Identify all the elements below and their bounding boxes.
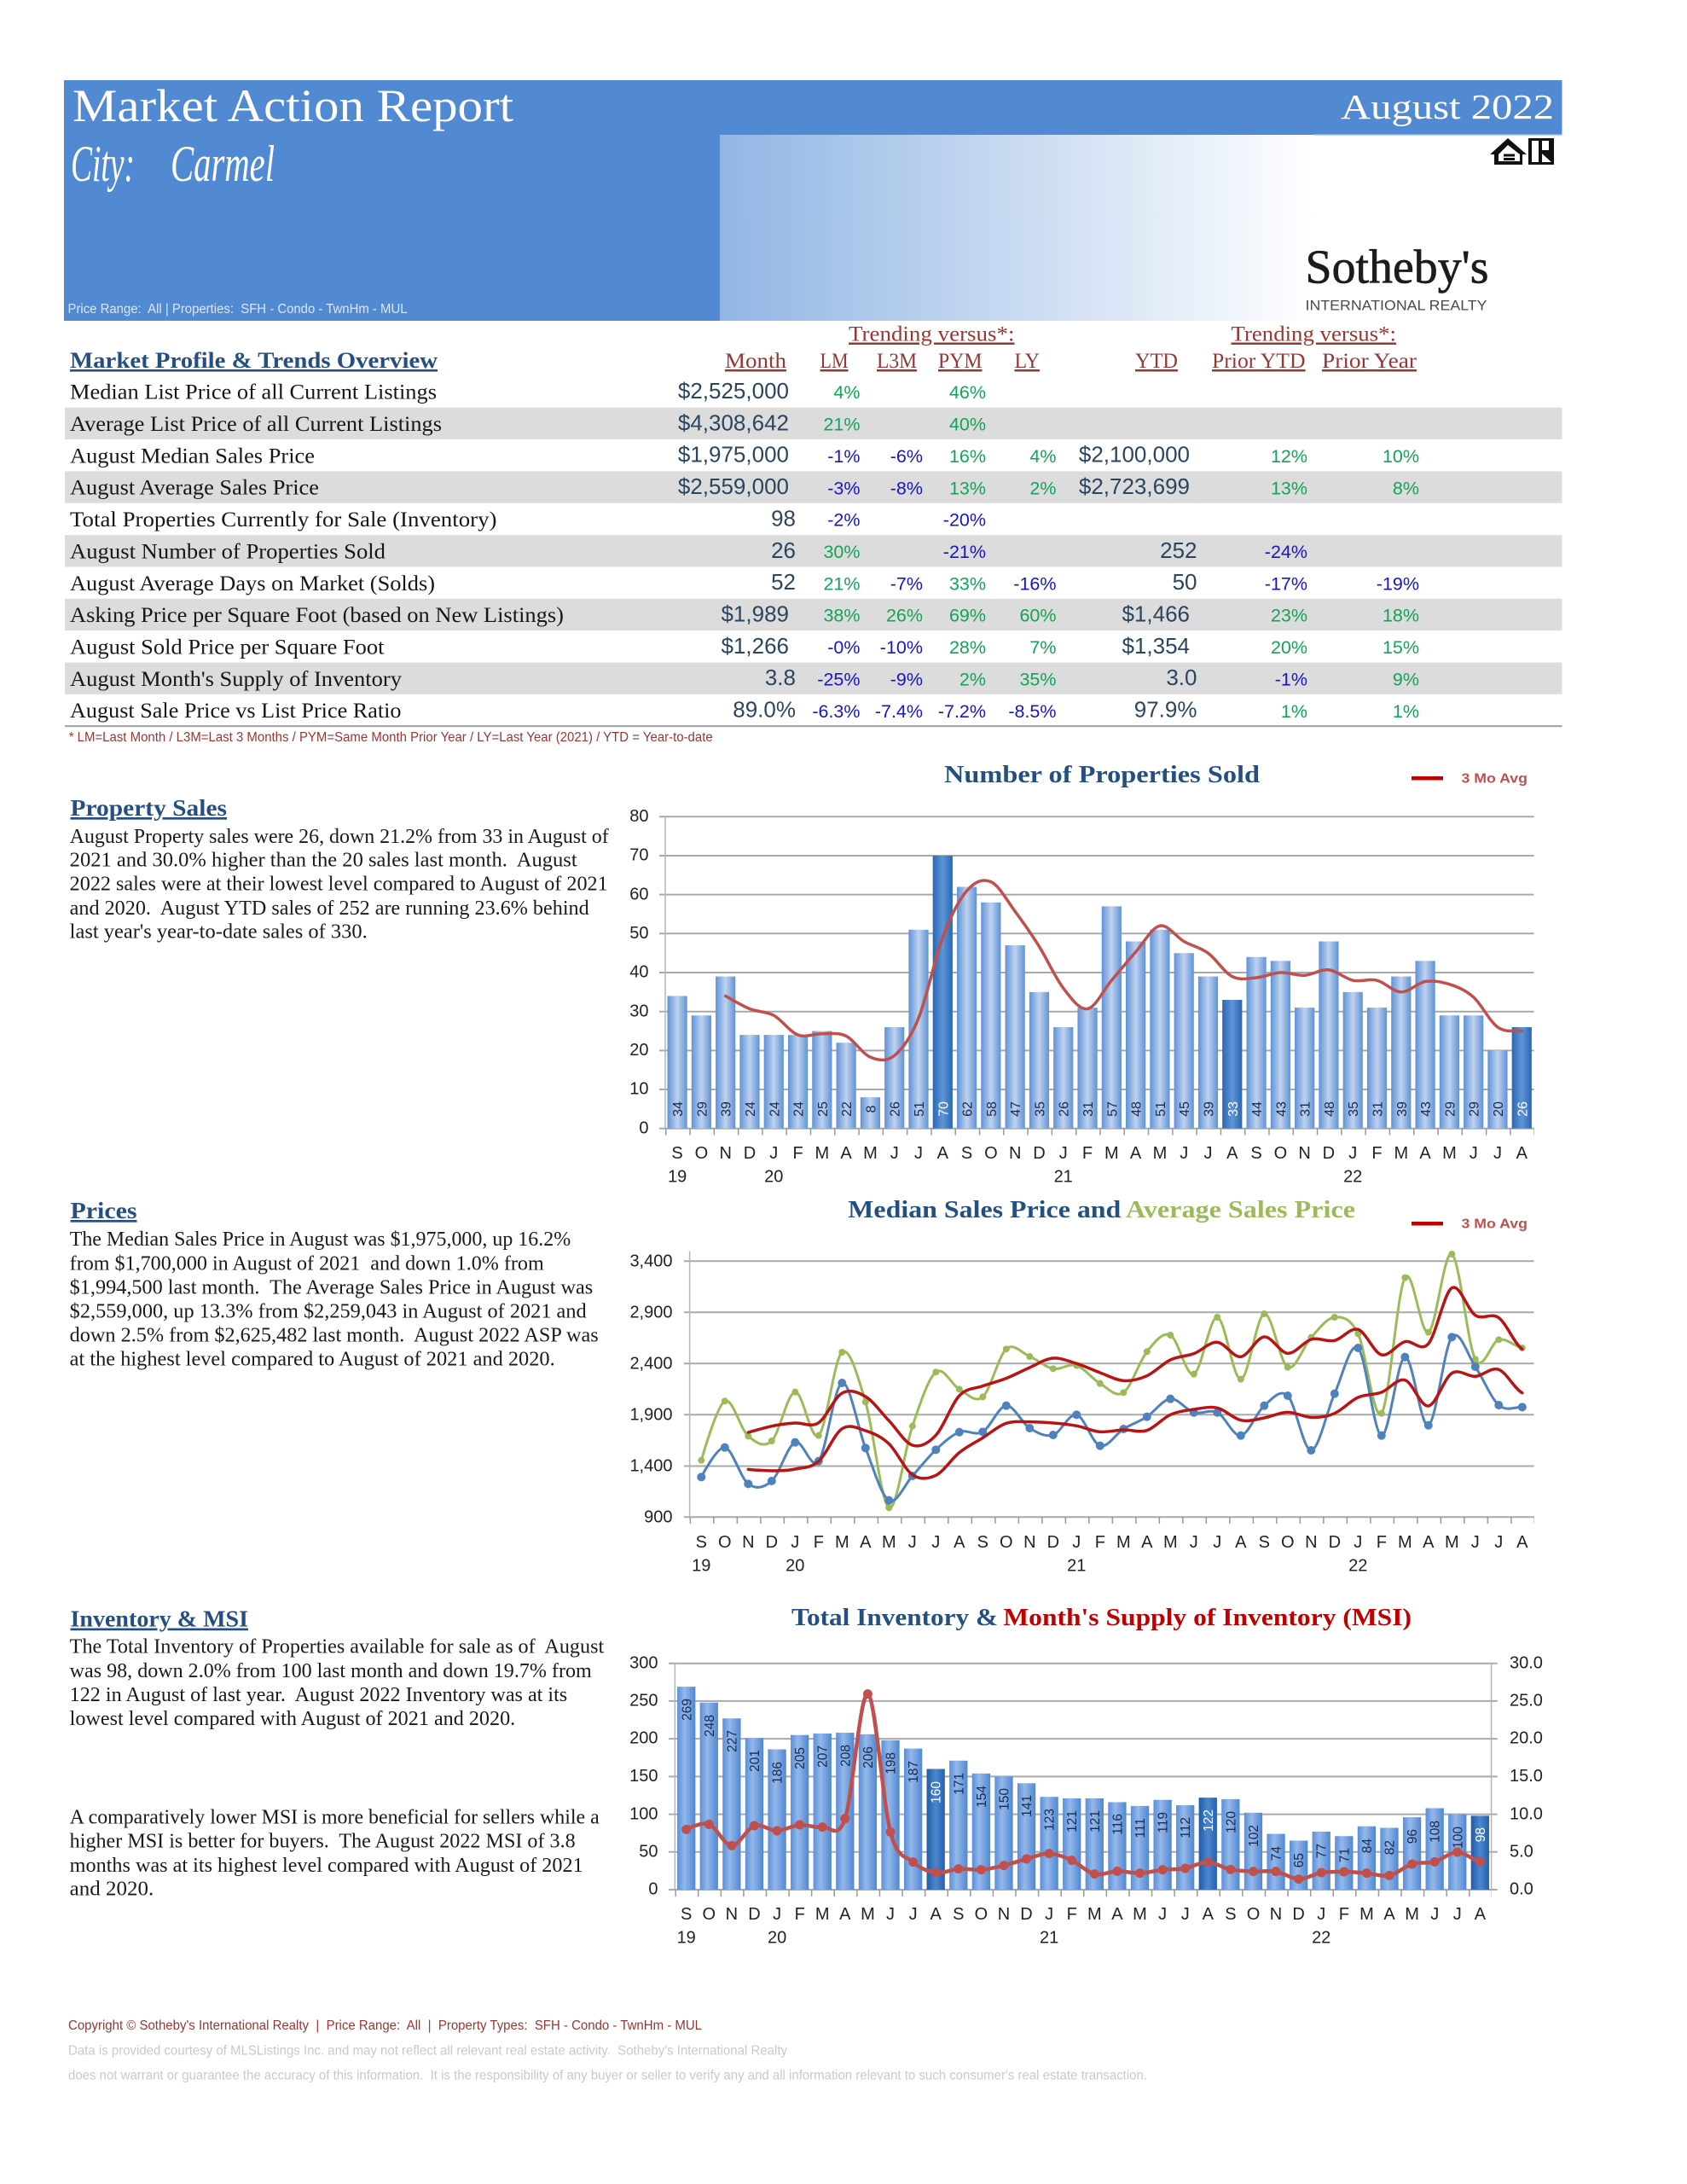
row: average sales price: $2,723,699 bbox=[1079, 473, 1190, 499]
left y axis labels: 0 bbox=[648, 1880, 658, 1899]
row: average list price: 21% bbox=[823, 415, 860, 435]
row: days on market: 50 bbox=[1173, 569, 1197, 595]
y axis labels: 60 bbox=[629, 886, 648, 904]
bar value labels: 22 bbox=[840, 1101, 855, 1117]
x axis years bbox=[668, 1168, 1362, 1187]
row: inventory: 98 bbox=[771, 505, 796, 531]
bar value labels: 43 bbox=[1419, 1101, 1434, 1117]
y axis labels: 80 bbox=[629, 807, 648, 826]
column headers: PYM bbox=[938, 350, 983, 373]
row: sale to list ratio: -8.5% bbox=[1008, 701, 1056, 722]
bar value labels: 186 bbox=[771, 1762, 785, 1784]
chart title: Number of Properties Sold bbox=[944, 762, 1260, 788]
row: sold price per square foot: -0% bbox=[827, 637, 860, 658]
y axis labels bbox=[629, 1252, 672, 1527]
right y axis labels: 5.0 bbox=[1510, 1843, 1533, 1862]
x axis years: 22 bbox=[1312, 1928, 1330, 1947]
footer disclaimer: does not warrant or guarantee the accuracy of this information. It is the responsibility of any buyer or seller to verify any and all information relevant to such consumer's real estate transaction. bbox=[68, 2068, 1147, 2082]
row: sold price per square foot: 28% bbox=[949, 637, 986, 658]
y axis labels: 1,400 bbox=[629, 1457, 672, 1476]
bar value labels: 70 bbox=[936, 1101, 951, 1117]
city name: Carmel bbox=[171, 136, 275, 192]
bar value labels: 65 bbox=[1292, 1853, 1307, 1867]
row: sale to list ratio bbox=[70, 696, 1419, 723]
text block: inventory and MSI: lowest level compared with August of 2021 and 2020. bbox=[70, 1708, 515, 1730]
text block: prices bbox=[70, 1198, 599, 1370]
icon: equal housing and realtor bbox=[1490, 138, 1554, 165]
chart: median and average sales price bbox=[629, 1197, 1534, 1576]
row: median list price: $2,525,000 bbox=[678, 378, 789, 404]
bar value labels: 171 bbox=[952, 1773, 966, 1795]
bar value labels: 34 bbox=[671, 1101, 686, 1117]
text block: prices: at the highest level compared to August of 2021 and 2020. bbox=[70, 1348, 555, 1370]
row: median list price: Median List Price of all Current Listings bbox=[70, 381, 437, 404]
bar value labels: 24 bbox=[744, 1101, 758, 1117]
row: months supply: 35% bbox=[1019, 669, 1056, 689]
row: months supply: August Month's Supply of Inventory bbox=[70, 668, 403, 691]
text block: prices: from $1,700,000 in August of 2021 and down 1.0% from bbox=[70, 1252, 544, 1275]
column headers: LM bbox=[820, 350, 848, 373]
bar value labels: 227 bbox=[725, 1730, 740, 1752]
line: 3 month average bbox=[726, 880, 1522, 1060]
table heading: Market Profile & Trends Overview bbox=[70, 348, 438, 373]
bar value labels: 116 bbox=[1110, 1814, 1125, 1835]
row: average list price: 40% bbox=[949, 415, 986, 435]
bar value labels: 77 bbox=[1315, 1844, 1330, 1858]
row: sold price per square foot: $1,354 bbox=[1122, 633, 1190, 659]
bar value labels: 71 bbox=[1337, 1848, 1352, 1862]
row: median sales price: -6% bbox=[890, 446, 923, 467]
bar value labels: 102 bbox=[1247, 1825, 1261, 1847]
column headers: LY bbox=[1015, 350, 1040, 373]
row: median sales price: 16% bbox=[949, 446, 986, 467]
left y axis labels: 100 bbox=[629, 1805, 658, 1824]
row: asking price per square foot: 26% bbox=[886, 606, 923, 626]
x axis years: 20 bbox=[764, 1168, 783, 1187]
line: 3 month average of average price bbox=[748, 1287, 1522, 1446]
row: sold price per square foot: 15% bbox=[1383, 637, 1419, 658]
row: sold price per square foot: 20% bbox=[1271, 637, 1307, 658]
bar value labels: 29 bbox=[1468, 1101, 1482, 1117]
row: sold price per square foot: 7% bbox=[1029, 637, 1056, 658]
footer disclaimer bbox=[68, 2018, 1147, 2082]
bar value labels: 48 bbox=[1130, 1101, 1145, 1117]
chart title: Average Sales Price bbox=[1126, 1197, 1355, 1223]
row: sale to list ratio: -6.3% bbox=[812, 701, 860, 722]
bar value labels: 31 bbox=[1371, 1101, 1385, 1117]
row: days on market: 21% bbox=[823, 573, 860, 594]
bar value labels: 45 bbox=[1178, 1101, 1192, 1117]
right y axis labels: 10.0 bbox=[1510, 1805, 1543, 1824]
text block: prices: $1,994,500 last month. The Average Sales Price in August was bbox=[70, 1276, 593, 1298]
column headers: Trending versus*: bbox=[849, 322, 1015, 346]
bar value labels: 82 bbox=[1383, 1840, 1397, 1855]
bar value labels: 208 bbox=[838, 1745, 853, 1767]
right y axis labels: 25.0 bbox=[1510, 1691, 1543, 1710]
row: properties sold: 26 bbox=[771, 537, 796, 563]
row: asking price per square foot: 23% bbox=[1271, 606, 1307, 626]
text block: inventory and MSI: and 2020. bbox=[70, 1879, 154, 1901]
row: median sales price: 10% bbox=[1383, 446, 1419, 467]
bar value labels: 31 bbox=[1299, 1101, 1313, 1117]
right y axis labels bbox=[1510, 1653, 1543, 1899]
bar value labels: 35 bbox=[1034, 1101, 1047, 1117]
bar value labels: 8 bbox=[864, 1105, 878, 1112]
text block: property sales: August Property sales were 26, down 21.2% from 33 in August of bbox=[70, 826, 609, 848]
row: sale to list ratio: -7.4% bbox=[875, 701, 923, 722]
row: sale to list ratio: August Sale Price vs List Price Ratio bbox=[70, 700, 401, 723]
row: asking price per square foot: 18% bbox=[1383, 606, 1419, 626]
bar value labels: 120 bbox=[1224, 1811, 1238, 1833]
column headers: Prior YTD bbox=[1212, 350, 1305, 373]
x axis years: 19 bbox=[677, 1928, 696, 1947]
bar value labels: 207 bbox=[816, 1745, 831, 1768]
bar value labels: 112 bbox=[1179, 1817, 1193, 1838]
row: asking price per square foot bbox=[70, 601, 1419, 627]
row: days on market: -19% bbox=[1377, 573, 1419, 594]
row: days on market: August Average Days on Market (Solds) bbox=[70, 572, 435, 595]
bar value labels: 24 bbox=[792, 1101, 807, 1117]
text block: property sales bbox=[70, 795, 609, 944]
row: average list price bbox=[70, 410, 986, 436]
x axis years: 21 bbox=[1040, 1928, 1058, 1947]
bar value labels: 43 bbox=[1274, 1101, 1289, 1117]
bar value labels: 39 bbox=[1203, 1101, 1216, 1117]
header banner bbox=[64, 80, 1562, 321]
row: days on market: -7% bbox=[890, 573, 923, 594]
bars: properties sold per month bbox=[668, 856, 1532, 1129]
column headers: YTD bbox=[1135, 350, 1178, 373]
row: asking price per square foot: $1,989 bbox=[721, 601, 789, 626]
left y axis labels: 50 bbox=[639, 1843, 658, 1862]
bar value labels: 141 bbox=[1020, 1795, 1035, 1817]
footnote: * LM=Last Month / L3M=Last 3 Months / PYM=Same Month Prior Year / LY=Last Year (2021) / YTD = Year-to-date bbox=[69, 730, 713, 745]
y axis labels: 70 bbox=[629, 846, 648, 865]
x axis years: 22 bbox=[1343, 1168, 1362, 1187]
y axis labels: 900 bbox=[644, 1508, 672, 1527]
row: days on market: 33% bbox=[949, 573, 986, 594]
text block: inventory and MSI: 122 in August of last year. August 2022 Inventory was at its bbox=[70, 1684, 567, 1706]
row: asking price per square foot: Asking Price per Square Foot (based on New Listings) bbox=[70, 604, 564, 627]
row: asking price per square foot: 38% bbox=[823, 606, 860, 626]
row: median list price: 4% bbox=[833, 382, 860, 403]
row: months supply: 9% bbox=[1393, 669, 1419, 689]
chart title: Total Inventory & bbox=[791, 1605, 998, 1631]
row: months supply: 3.0 bbox=[1166, 665, 1197, 690]
logo: Sotheby's International Realty: Sotheby's bbox=[1305, 241, 1489, 294]
city name bbox=[71, 136, 275, 192]
y axis labels: 40 bbox=[629, 962, 648, 981]
row: median sales price bbox=[70, 442, 1419, 468]
y axis labels: 2,400 bbox=[629, 1355, 672, 1374]
x axis years: 22 bbox=[1348, 1557, 1367, 1576]
row: days on market: -16% bbox=[1013, 573, 1056, 594]
row: properties sold: August Number of Properties Sold bbox=[70, 540, 386, 563]
footer disclaimer: Data is provided courtesy of MLSListings Inc. and may not reflect all relevant real estate activity. Sotheby's International Realty bbox=[68, 2044, 787, 2058]
row: properties sold: 252 bbox=[1160, 537, 1197, 563]
bar value labels: 198 bbox=[884, 1752, 899, 1774]
row: average list price: $4,308,642 bbox=[678, 410, 789, 435]
row: average sales price: 13% bbox=[1271, 478, 1307, 498]
bar value labels bbox=[671, 1101, 1530, 1117]
bar value labels: 84 bbox=[1360, 1838, 1375, 1853]
bar value labels: 35 bbox=[1347, 1101, 1361, 1117]
bar value labels: 160 bbox=[930, 1781, 944, 1804]
row: months supply: -1% bbox=[1275, 669, 1307, 689]
row: sale to list ratio: 1% bbox=[1281, 701, 1307, 722]
bar value labels: 57 bbox=[1105, 1101, 1120, 1117]
row: asking price per square foot: 60% bbox=[1019, 606, 1056, 626]
text block: prices: down 2.5% from $2,625,482 last month. August 2022 ASP was bbox=[70, 1324, 599, 1346]
bar value labels: 33 bbox=[1226, 1101, 1241, 1117]
footer disclaimer: Copyright © Sotheby's International Realty | Price Range: All | Property Types: SFH - Condo - TwnHm - MUL bbox=[68, 2018, 702, 2033]
bar value labels: 122 bbox=[1202, 1809, 1216, 1832]
city name: City: bbox=[71, 136, 135, 192]
row: properties sold: 30% bbox=[823, 542, 860, 562]
bar value labels: 248 bbox=[703, 1715, 717, 1737]
bar value labels: 121 bbox=[1088, 1810, 1103, 1833]
row: average sales price: 13% bbox=[949, 478, 986, 498]
bar value labels: 111 bbox=[1133, 1818, 1148, 1838]
text block: property sales: 2022 sales were at their lowest level compared to August of 2021 bbox=[70, 874, 608, 896]
x axis years: 21 bbox=[1067, 1557, 1086, 1576]
left y axis labels: 300 bbox=[629, 1653, 658, 1672]
legend: 3 month average bbox=[1412, 1217, 1528, 1231]
text block: inventory and MSI: higher MSI is better for buyers. The August 2022 MSI of 3.8 bbox=[70, 1831, 576, 1853]
bar value labels: 154 bbox=[975, 1786, 989, 1808]
row: properties sold: -24% bbox=[1265, 542, 1307, 562]
row: sold price per square foot: -10% bbox=[880, 637, 923, 658]
text block: property sales: 2021 and 30.0% higher than the 20 sales last month. August bbox=[70, 850, 577, 872]
title: Market Action Report bbox=[72, 80, 513, 131]
heading: inventory and MSI: Inventory & MSI bbox=[70, 1606, 248, 1631]
y axis labels: 3,400 bbox=[629, 1252, 672, 1271]
bar value labels: 25 bbox=[816, 1101, 831, 1117]
text block: property sales: and 2020. August YTD sales of 252 are running 23.6% behind bbox=[70, 897, 589, 920]
row: inventory: Total Properties Currently for Sale (Inventory) bbox=[70, 508, 496, 531]
row: sale to list ratio: -7.2% bbox=[938, 701, 986, 722]
legend: 3 month average: 3 Mo Avg bbox=[1462, 1217, 1528, 1231]
row: median sales price: August Median Sales Price bbox=[70, 444, 315, 468]
line: months supply of inventory bbox=[687, 1694, 1480, 1879]
line: average sales price bbox=[701, 1254, 1522, 1508]
bar value labels bbox=[681, 1699, 1488, 1867]
left y axis labels: 250 bbox=[629, 1691, 658, 1710]
column headers: L3M bbox=[877, 350, 917, 373]
row: inventory: -20% bbox=[943, 510, 986, 531]
bar value labels: 48 bbox=[1323, 1101, 1337, 1117]
bar value labels: 123 bbox=[1043, 1809, 1058, 1831]
chart title: Median Sales Price and bbox=[848, 1197, 1122, 1223]
row: properties sold bbox=[70, 537, 1307, 563]
row: sold price per square foot: $1,266 bbox=[721, 633, 789, 659]
bar value labels: 119 bbox=[1157, 1812, 1171, 1833]
row: median sales price: -1% bbox=[827, 446, 860, 467]
bar value labels: 206 bbox=[861, 1746, 876, 1769]
row: median list price bbox=[70, 378, 986, 404]
x axis years: 21 bbox=[1054, 1168, 1073, 1187]
row: months supply bbox=[70, 665, 1419, 691]
chart title: Month's Supply of Inventory (MSI) bbox=[1003, 1605, 1412, 1631]
row: average sales price: 2% bbox=[1029, 478, 1056, 498]
bar value labels: 51 bbox=[1154, 1101, 1168, 1117]
chart: number of properties sold bbox=[629, 762, 1534, 1187]
x axis years: 19 bbox=[668, 1168, 687, 1187]
bar value labels: 121 bbox=[1065, 1810, 1080, 1833]
right y axis labels: 20.0 bbox=[1510, 1728, 1543, 1747]
row: sale to list ratio: 97.9% bbox=[1134, 696, 1197, 722]
bar value labels: 29 bbox=[695, 1101, 710, 1117]
row: asking price per square foot: $1,466 bbox=[1122, 601, 1190, 626]
row: sold price per square foot bbox=[70, 633, 1419, 659]
row: median sales price: $1,975,000 bbox=[678, 442, 789, 468]
x axis years: 20 bbox=[768, 1928, 786, 1947]
text block: inventory and MSI: A comparatively lower MSI is more beneficial for sellers while a bbox=[70, 1807, 600, 1829]
bar value labels: 20 bbox=[1492, 1101, 1506, 1117]
bar value labels: 96 bbox=[1406, 1829, 1420, 1844]
chart title bbox=[848, 1197, 1355, 1223]
y axis labels: 0 bbox=[639, 1119, 648, 1138]
column headers: Prior Year bbox=[1322, 350, 1417, 373]
text block: prices: The Median Sales Price in August was $1,975,000, up 16.2% bbox=[70, 1228, 571, 1251]
row: asking price per square foot: 69% bbox=[949, 606, 986, 626]
bar value labels: 201 bbox=[748, 1750, 762, 1772]
lines: prices bbox=[701, 1254, 1522, 1508]
text block: inventory and MSI: months was at its highest level compared with August of 2021 bbox=[70, 1855, 583, 1877]
price range note: Price Range: All | Properties: SFH - Condo - TwnHm - MUL bbox=[68, 302, 408, 317]
row: average list price: Average List Price of all Current Listings bbox=[70, 413, 442, 436]
bar value labels: 205 bbox=[793, 1747, 808, 1769]
heading: property sales: Property Sales bbox=[70, 795, 227, 821]
panel: market profile table bbox=[65, 322, 1562, 727]
y axis labels: 20 bbox=[629, 1041, 648, 1060]
bar value labels: 62 bbox=[961, 1101, 976, 1117]
bar value labels: 26 bbox=[889, 1101, 903, 1117]
y axis labels: 30 bbox=[629, 1002, 648, 1020]
row: days on market bbox=[70, 569, 1419, 595]
row: months supply: -25% bbox=[817, 669, 860, 689]
bar value labels: 29 bbox=[1443, 1101, 1458, 1117]
row: sale to list ratio: 89.0% bbox=[733, 696, 796, 722]
row: months supply: -9% bbox=[890, 669, 923, 689]
x axis months: SONDJFMAMJJASONDJFMAMJJASONDJFMAMJJA bbox=[671, 1144, 1528, 1163]
y axis labels: 50 bbox=[629, 924, 648, 943]
bar value labels: 39 bbox=[720, 1101, 734, 1117]
row: days on market: 52 bbox=[771, 569, 796, 595]
row: average sales price: August Average Sales Price bbox=[70, 477, 319, 500]
x axis years: 20 bbox=[786, 1557, 804, 1576]
x axis months: SONDJFMAMJJASONDJFMAMJJASONDJFMAMJJA bbox=[681, 1905, 1487, 1924]
text block: inventory and MSI: The Total Inventory of Properties available for sale as of August bbox=[70, 1636, 605, 1658]
logo: Sotheby's International Realty: INTERNATIONAL REALTY bbox=[1305, 298, 1487, 313]
text block: inventory and MSI: was 98, down 2.0% from 100 last month and down 19.7% from bbox=[70, 1660, 592, 1682]
text block: inventory and MSI bbox=[70, 1606, 605, 1901]
bar value labels: 26 bbox=[1058, 1101, 1072, 1117]
column headers: Trending versus*: bbox=[1232, 322, 1396, 346]
row: days on market: -17% bbox=[1265, 573, 1307, 594]
y axis labels bbox=[629, 807, 648, 1138]
row: average sales price bbox=[70, 473, 1419, 500]
line: median sales price bbox=[701, 1335, 1522, 1501]
right y axis labels: 0.0 bbox=[1510, 1880, 1533, 1899]
text block: property sales: last year's year-to-date sales of 330. bbox=[70, 921, 368, 944]
left y axis labels: 150 bbox=[629, 1767, 658, 1786]
bar value labels: 24 bbox=[768, 1101, 782, 1117]
row: median sales price: $2,100,000 bbox=[1079, 442, 1190, 468]
row: sold price per square foot: August Sold Price per Square Foot bbox=[70, 636, 385, 659]
row: average sales price: $2,559,000 bbox=[678, 473, 789, 499]
row: median list price: 46% bbox=[949, 382, 986, 403]
row: average sales price: 8% bbox=[1393, 478, 1419, 498]
row: months supply: 3.8 bbox=[765, 665, 796, 690]
row: months supply: 2% bbox=[959, 669, 986, 689]
bar value labels: 47 bbox=[1009, 1101, 1023, 1117]
row: median sales price: 4% bbox=[1029, 446, 1056, 467]
bar value labels: 150 bbox=[998, 1788, 1012, 1810]
right y axis labels: 15.0 bbox=[1510, 1767, 1543, 1786]
bar value labels: 51 bbox=[913, 1101, 927, 1117]
bar value labels: 187 bbox=[907, 1761, 921, 1783]
text block: prices: $2,559,000, up 13.3% from $2,259,043 in August of 2021 and bbox=[70, 1301, 587, 1323]
row: properties sold: -21% bbox=[943, 542, 986, 562]
right y axis labels: 30.0 bbox=[1510, 1653, 1543, 1672]
chart title bbox=[791, 1605, 1412, 1631]
heading: prices: Prices bbox=[70, 1198, 136, 1223]
column headers: Month bbox=[725, 350, 787, 373]
bar value labels: 269 bbox=[681, 1699, 694, 1721]
y axis labels: 2,900 bbox=[629, 1304, 672, 1322]
bar value labels: 58 bbox=[985, 1101, 1000, 1117]
x axis years: 19 bbox=[692, 1557, 710, 1576]
bar value labels: 98 bbox=[1474, 1827, 1488, 1842]
column headers bbox=[725, 322, 1417, 373]
x axis years bbox=[692, 1557, 1367, 1576]
report date: August 2022 bbox=[1341, 87, 1554, 126]
legend: 3 month average: 3 Mo Avg bbox=[1462, 772, 1528, 787]
row: sale to list ratio: 1% bbox=[1393, 701, 1419, 722]
y axis labels: 10 bbox=[629, 1080, 648, 1099]
bar value labels: 100 bbox=[1451, 1827, 1465, 1849]
left y axis labels bbox=[629, 1653, 658, 1899]
bar value labels: 31 bbox=[1081, 1101, 1096, 1117]
bar value labels: 44 bbox=[1250, 1101, 1265, 1117]
bar value labels: 39 bbox=[1395, 1101, 1410, 1117]
bars: total inventory bbox=[677, 1687, 1489, 1890]
legend: 3 month average bbox=[1412, 772, 1528, 787]
line: 3 month average of median price bbox=[748, 1369, 1522, 1478]
y axis labels: 1,900 bbox=[629, 1406, 672, 1425]
row: average sales price: -3% bbox=[827, 478, 860, 498]
row: inventory: -2% bbox=[827, 510, 860, 531]
chart: total inventory and months supply bbox=[629, 1605, 1543, 1947]
row: inventory bbox=[70, 505, 986, 531]
row: median sales price: 12% bbox=[1271, 446, 1307, 467]
row: average sales price: -8% bbox=[890, 478, 923, 498]
bar value labels: 108 bbox=[1429, 1821, 1443, 1843]
x axis months: SONDJFMAMJJASONDJFMAMJJASONDJFMAMJJA bbox=[696, 1533, 1528, 1552]
left y axis labels: 200 bbox=[629, 1728, 658, 1747]
bar value labels: 74 bbox=[1269, 1846, 1284, 1861]
bar value labels: 26 bbox=[1516, 1101, 1530, 1117]
x axis years bbox=[677, 1928, 1330, 1947]
